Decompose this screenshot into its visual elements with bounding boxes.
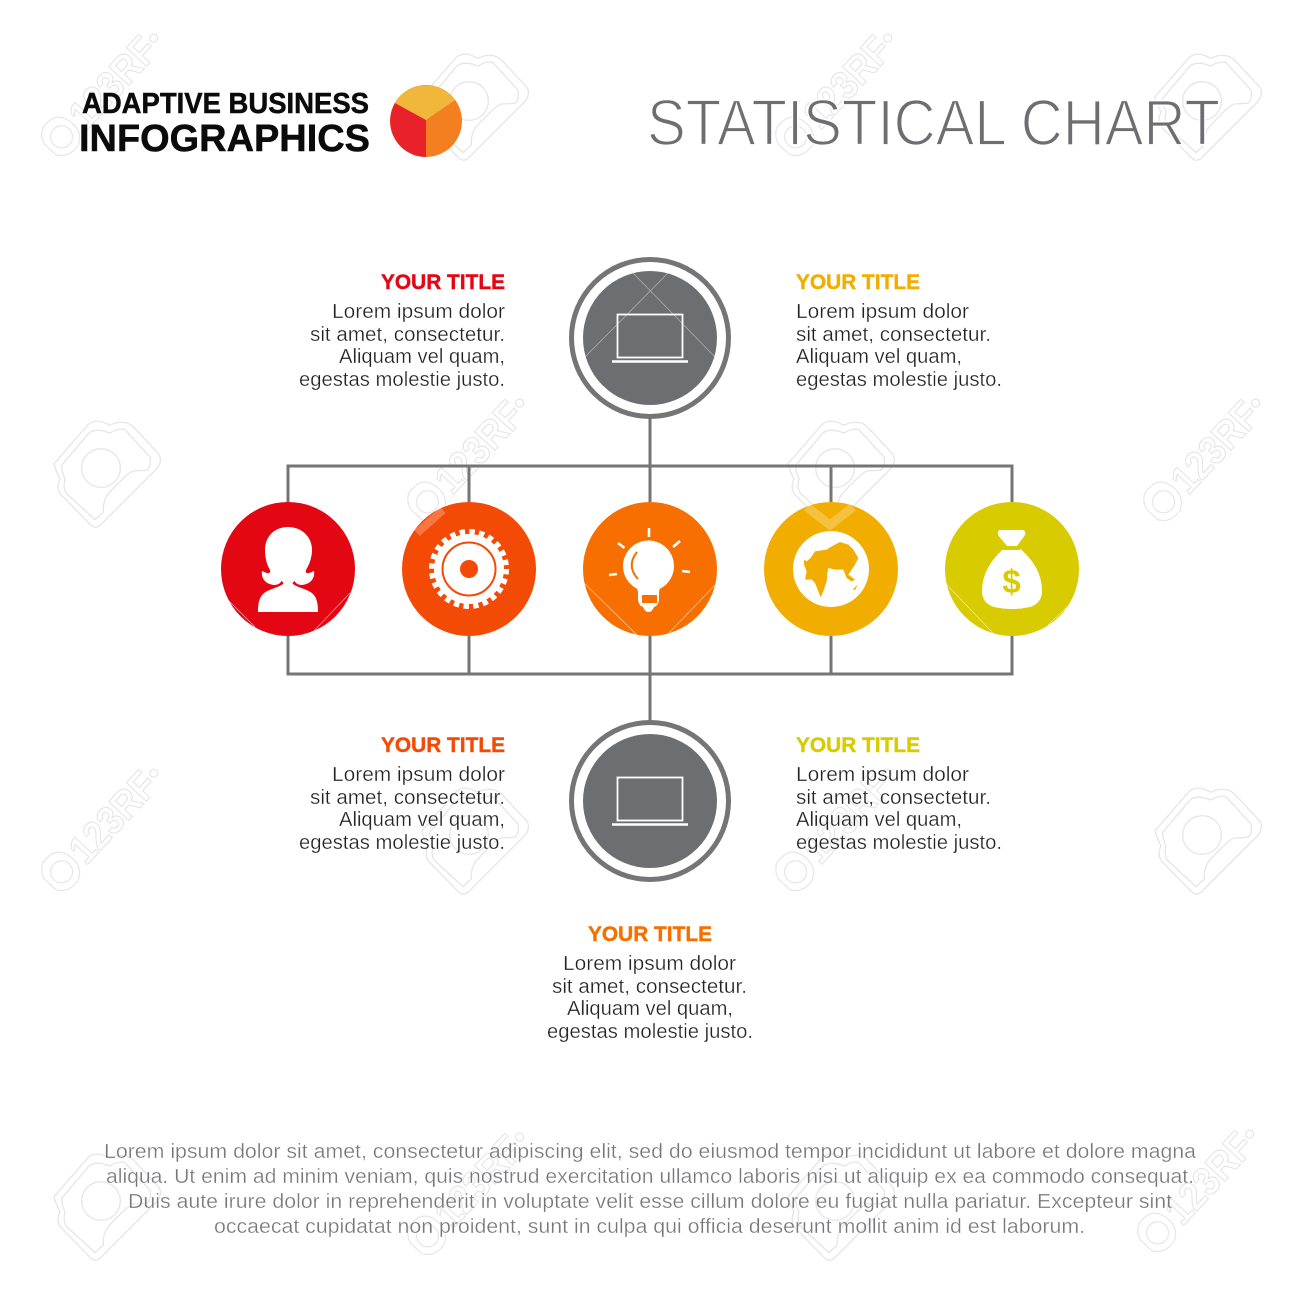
icon: light bulb [609,528,690,612]
text block: bottom right: Aliquam vel quam, [796,809,962,831]
icon: globe [793,531,869,607]
text block: top left: sit amet, consectetur. [310,324,505,346]
icon: money bag: $ [1002,563,1021,600]
footer paragraph [104,1141,1197,1238]
text block: top left: egestas molestie justo. [299,369,505,391]
logo heading: INFOGRAPHICS [79,118,370,160]
text block: bottom center: YOUR TITLE [588,923,712,946]
logo heading: ADAPTIVE BUSINESS [82,88,369,120]
footer paragraph: occaecat cupidatat non proident, sunt in culpa qui officia deserunt mollit anim id est laborum. [214,1216,1085,1238]
icon: woman silhouette [258,527,318,612]
text block: top left: Aliquam vel quam, [339,346,505,368]
text block: bottom center: sit amet, consectetur. [552,976,747,998]
connector lines [288,418,1012,722]
text block: top right: Lorem ipsum dolor [796,301,969,323]
text block: bottom center [547,923,753,1043]
icon: logo pie chart [390,85,462,157]
text block: bottom left: sit amet, consectetur. [310,787,505,809]
text block: top left [299,271,505,391]
text block: top left: Lorem ipsum dolor [332,301,505,323]
text block: top right: sit amet, consectetur. [796,324,991,346]
text block: bottom center: Aliquam vel quam, [567,998,733,1020]
icon: laptop [612,314,688,362]
node: gear [402,502,536,636]
text block: bottom left: Lorem ipsum dolor [332,764,505,786]
footer paragraph: Duis aute irure dolor in reprehenderit in voluptate velit esse cillum dolore eu fugiat nulla pariatur. Excepteur sint [128,1191,1172,1213]
text block: bottom left: egestas molestie justo. [299,832,505,854]
text block: top left: YOUR TITLE [381,271,505,294]
title: STATISTICAL CHART [647,86,1220,159]
node: person [221,502,355,636]
text block: bottom right: Lorem ipsum dolor [796,764,969,786]
text block: bottom right: sit amet, consectetur. [796,787,991,809]
text block: bottom right: egestas molestie justo. [796,832,1002,854]
text block: bottom center: Lorem ipsum dolor [563,953,736,975]
text block: bottom left: Aliquam vel quam, [339,809,505,831]
text block: bottom right [796,734,1002,854]
top laptop node [572,260,728,416]
node: light bulb [583,502,717,636]
node: money bag [945,502,1079,636]
text block: bottom left: YOUR TITLE [381,734,505,757]
icon: gear [432,532,506,606]
text block: top right: YOUR TITLE [796,271,920,294]
text block: top right: Aliquam vel quam, [796,346,962,368]
text block: bottom center: egestas molestie justo. [547,1021,753,1043]
icon: laptop [612,778,688,824]
text block: bottom left [299,734,505,854]
text block: bottom right: YOUR TITLE [796,734,920,757]
node: globe [764,502,898,636]
footer paragraph: aliqua. Ut enim ad minim veniam, quis nostrud exercitation ullamco laboris nisi ut aliquip ex ea commodo consequat. [106,1166,1194,1188]
logo heading [79,88,370,160]
footer paragraph: Lorem ipsum dolor sit amet, consectetur adipiscing elit, sed do eiusmod tempor incididunt ut labore et dolore magna [104,1141,1197,1163]
bottom laptop node [572,722,728,880]
text block: top right [796,271,1002,391]
text block: top right: egestas molestie justo. [796,369,1002,391]
